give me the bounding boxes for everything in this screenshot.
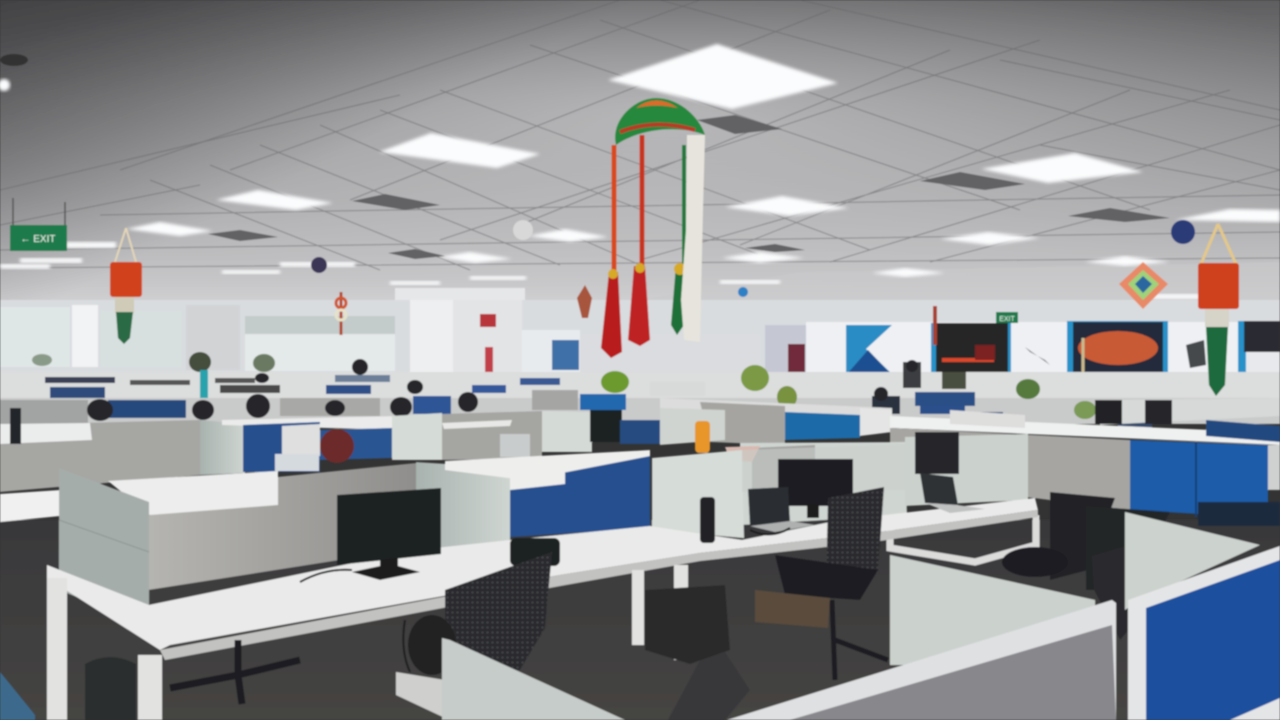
glass panel: right: [1125, 512, 1260, 610]
floor: [0, 520, 1280, 720]
person with red hair: [320, 429, 354, 463]
office chairs: [170, 487, 1170, 720]
ceiling: [0, 0, 1280, 330]
tricolour tassel left: [110, 228, 142, 344]
poster: right edge: [1238, 321, 1280, 389]
poster: red car: [931, 323, 1011, 378]
chair: right group: [1002, 492, 1170, 640]
back wall and windows: [0, 300, 1280, 385]
monitor: left: [337, 488, 441, 580]
wall with posters: [806, 321, 1280, 392]
centre cubicle: [725, 432, 1028, 525]
main tricolour hanging: [601, 98, 705, 358]
distant workstations: [0, 372, 1280, 424]
foreground right cubicle panels: [442, 502, 1280, 720]
ceiling speaker left: [0, 54, 28, 66]
desk legs: [47, 565, 688, 720]
diamond ornament: [1119, 262, 1168, 309]
white pedestal: [396, 672, 445, 718]
panel: grey foreground: [727, 600, 1116, 720]
monitors: [337, 459, 985, 580]
exit sign left: [10, 198, 67, 251]
chair: centre right: [775, 487, 888, 680]
glass panel: front: [442, 638, 625, 720]
exit sign left: ← EXIT: [20, 234, 56, 245]
plants: [32, 352, 1214, 419]
middle right desk row: [660, 392, 1280, 518]
chair: mesh back left: [170, 552, 552, 704]
cardboard box under desk: [755, 590, 830, 628]
tricolour tassel right: [1198, 224, 1239, 396]
desk accessory: [510, 538, 560, 566]
wires on desk: [300, 528, 790, 672]
bin: [85, 657, 136, 720]
poster: blue geometric: [846, 325, 892, 374]
dark pedestal: [645, 585, 730, 664]
foreground left cubicle panels: [59, 444, 905, 625]
ceiling soffit band: [640, 262, 1280, 300]
exit sign right: EXIT: [999, 316, 1016, 323]
laptop: centre: [748, 487, 815, 532]
exit sign right: [996, 312, 1018, 323]
panel: blue right: [1128, 546, 1280, 720]
poster: orange dome: [1067, 321, 1168, 384]
mid-left cubicle row: [0, 408, 725, 522]
corner blue object: [0, 672, 35, 720]
people at desks: [87, 359, 1152, 431]
air vents: [208, 115, 1170, 259]
white pillar: [395, 288, 525, 385]
ceiling lights: [0, 44, 1280, 316]
laptop: right: [920, 473, 985, 513]
desk frame right: [890, 515, 1036, 562]
orange bottle: [695, 421, 710, 453]
chair: foreground: [668, 652, 750, 720]
monitor: centre: [778, 459, 853, 518]
water bottle: [700, 497, 715, 543]
small hanging ornaments: [311, 220, 1195, 372]
foreground white desk: [47, 498, 1038, 720]
